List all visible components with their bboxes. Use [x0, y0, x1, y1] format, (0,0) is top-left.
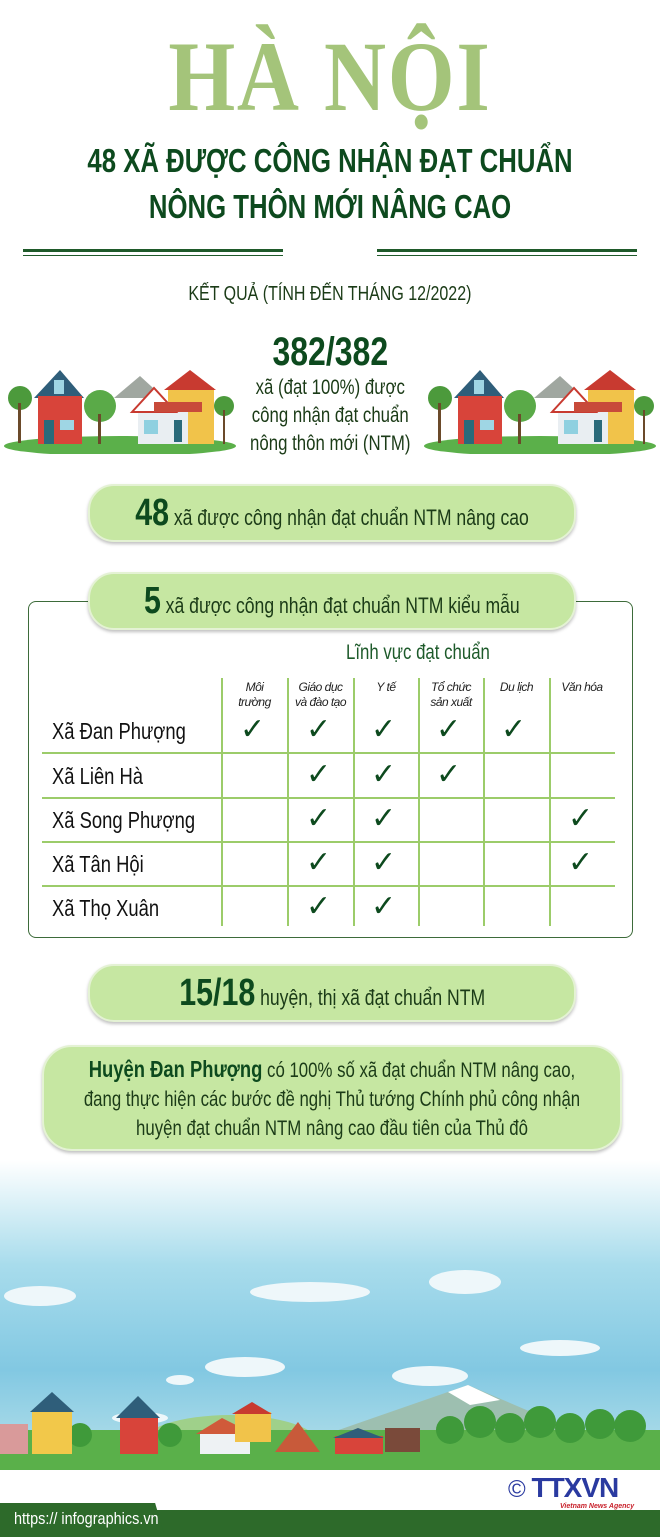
pill: 48 communes: 48xã được công nhận đạt chuẩn NTM nâng cao [135, 492, 529, 534]
landscape illustration [0, 1170, 660, 1470]
table: ✓ [306, 845, 331, 880]
table: Môi [246, 680, 263, 694]
table: ✓ [436, 757, 461, 792]
pill: 5 communes [88, 572, 576, 630]
table: ✓ [371, 712, 396, 747]
icon: houses right [424, 370, 656, 454]
table: Văn hóa [561, 680, 603, 694]
table: ✓ [306, 757, 331, 792]
table: Xã Liên Hà [52, 763, 143, 789]
table: Du lịch [500, 680, 533, 694]
table: ✓ [306, 712, 331, 747]
subtitle: 48 XÃ ĐƯỢC CÔNG NHẬN ĐẠT CHUẨN [87, 142, 573, 179]
pill: 5 communes: 5xã được công nhận đạt chuẩn NTM kiểu mẫu [144, 580, 520, 622]
subtitle [87, 142, 573, 225]
table: Tổ chức [431, 680, 471, 694]
table [42, 641, 615, 926]
table: sản xuất [430, 695, 472, 709]
text: Vietnam News Agency [560, 1503, 634, 1510]
table: Lĩnh vực đạt chuẩn [346, 641, 490, 664]
table: Xã Thọ Xuân [52, 895, 159, 921]
table: ✓ [501, 712, 526, 747]
footer url: https:// infographics.vn [14, 1509, 159, 1528]
callout: Dan Phuong district: Huyện Đan Phượng có 100% số xã đạt chuẩn NTM nâng cao, [89, 1056, 575, 1082]
subtitle: NÔNG THÔN MỚI NÂNG CAO [149, 188, 511, 225]
table: trường [238, 695, 271, 709]
table: ✓ [568, 845, 593, 880]
title: HÀ NỘI [168, 21, 492, 132]
table: Y tế [376, 680, 396, 694]
pill: 15/18 districts [88, 964, 576, 1022]
table: ✓ [306, 801, 331, 836]
result heading: KẾT QUẢ (TÍNH ĐẾN THÁNG 12/2022) [188, 283, 472, 305]
icon: houses left [4, 370, 236, 454]
table: ✓ [240, 712, 265, 747]
table: ✓ [371, 889, 396, 924]
table: Xã Tân Hội [52, 851, 144, 877]
table: ✓ [436, 712, 461, 747]
pill: 48 communes [88, 484, 576, 542]
callout: Dan Phuong district: huyện đạt chuẩn NTM nâng cao đầu tiên của Thủ đô [136, 1117, 528, 1140]
table: Xã Đan Phượng [52, 718, 186, 744]
stat 382/382 [250, 330, 410, 455]
callout: Dan Phuong district: đang thực hiện các bước đề nghị Thủ tướng Chính phủ công nhận [84, 1088, 580, 1111]
table: ✓ [371, 845, 396, 880]
table: ✓ [371, 801, 396, 836]
stat 382/382: công nhận đạt chuẩn [252, 404, 408, 427]
table: ✓ [306, 889, 331, 924]
stat 382/382: xã (đạt 100%) được [255, 376, 405, 399]
table: Xã Song Phượng [52, 807, 195, 833]
table: ✓ [568, 801, 593, 836]
callout: Dan Phuong district [42, 1045, 622, 1151]
table: ✓ [371, 757, 396, 792]
stat 382/382: nông thôn mới (NTM) [250, 432, 410, 455]
logo: TTXVN: © TTXVN [508, 1472, 618, 1503]
table: và đào tạo [295, 695, 346, 709]
footer bar [0, 1510, 660, 1537]
table: Giáo dục [298, 680, 343, 694]
stat 382/382: 382/382 [272, 330, 388, 374]
panel: model communes table [28, 601, 633, 938]
pill: 15/18 districts: 15/18huyện, thị xã đạt chuẩn NTM [179, 972, 485, 1014]
